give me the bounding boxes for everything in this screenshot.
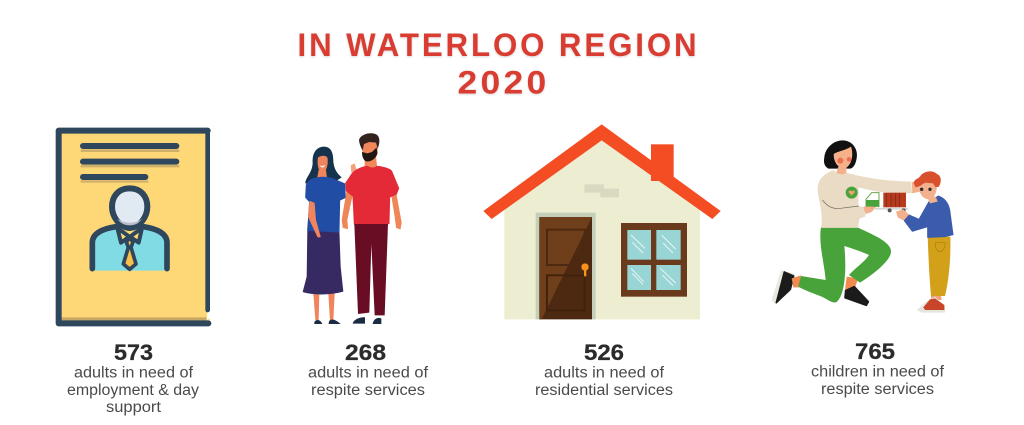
illustration: couple — [303, 133, 401, 324]
illustration: parent and child with toy truck — [772, 140, 953, 313]
stat: 526 adults residential services: residential services — [535, 382, 673, 399]
wall — [504, 138, 700, 319]
man — [342, 133, 401, 324]
woman — [772, 140, 920, 305]
stat: 765 children respite services: 765 — [855, 339, 895, 364]
stat: 268 adults respite services: respite services — [311, 382, 425, 399]
window — [621, 223, 687, 297]
chimney — [651, 144, 674, 181]
child — [896, 171, 953, 313]
shirt — [93, 227, 167, 271]
tie — [123, 238, 136, 269]
stat: 573 adults employment and day support: adults in need of — [74, 364, 194, 382]
stat: 526 adults residential services: 526 — [584, 340, 624, 365]
head — [112, 188, 147, 228]
stat: 573 adults employment and day support: 573 — [114, 340, 153, 365]
stat: 526 adults residential services: adults in need of — [544, 364, 665, 382]
title — [298, 27, 700, 100]
stat: 268 adults respite services: adults in need of — [308, 364, 429, 382]
stat: 573 adults employment and day support: support — [106, 399, 162, 416]
stat: 765 children respite services: respite services — [821, 381, 934, 398]
stat: 573 adults employment and day support — [67, 340, 199, 416]
woman — [303, 147, 345, 324]
stat: 765 children respite services: children in need of — [811, 364, 945, 380]
stat: 268 adults respite services — [308, 340, 429, 399]
bricks — [584, 184, 619, 197]
stat: 573 adults employment and day support: employment & day — [67, 382, 199, 399]
roof — [483, 124, 721, 219]
collar — [117, 228, 142, 243]
stat: 526 adults residential services — [535, 340, 673, 399]
icon: resume document — [59, 131, 211, 323]
title: 2020 — [458, 64, 550, 100]
stat: 765 children respite services — [811, 339, 945, 398]
title: IN WATERLOO REGION — [298, 27, 700, 63]
door — [536, 213, 596, 319]
illustration: house — [483, 124, 721, 319]
toy truck — [866, 193, 908, 212]
stat: 268 adults respite services: 268 — [345, 340, 386, 365]
